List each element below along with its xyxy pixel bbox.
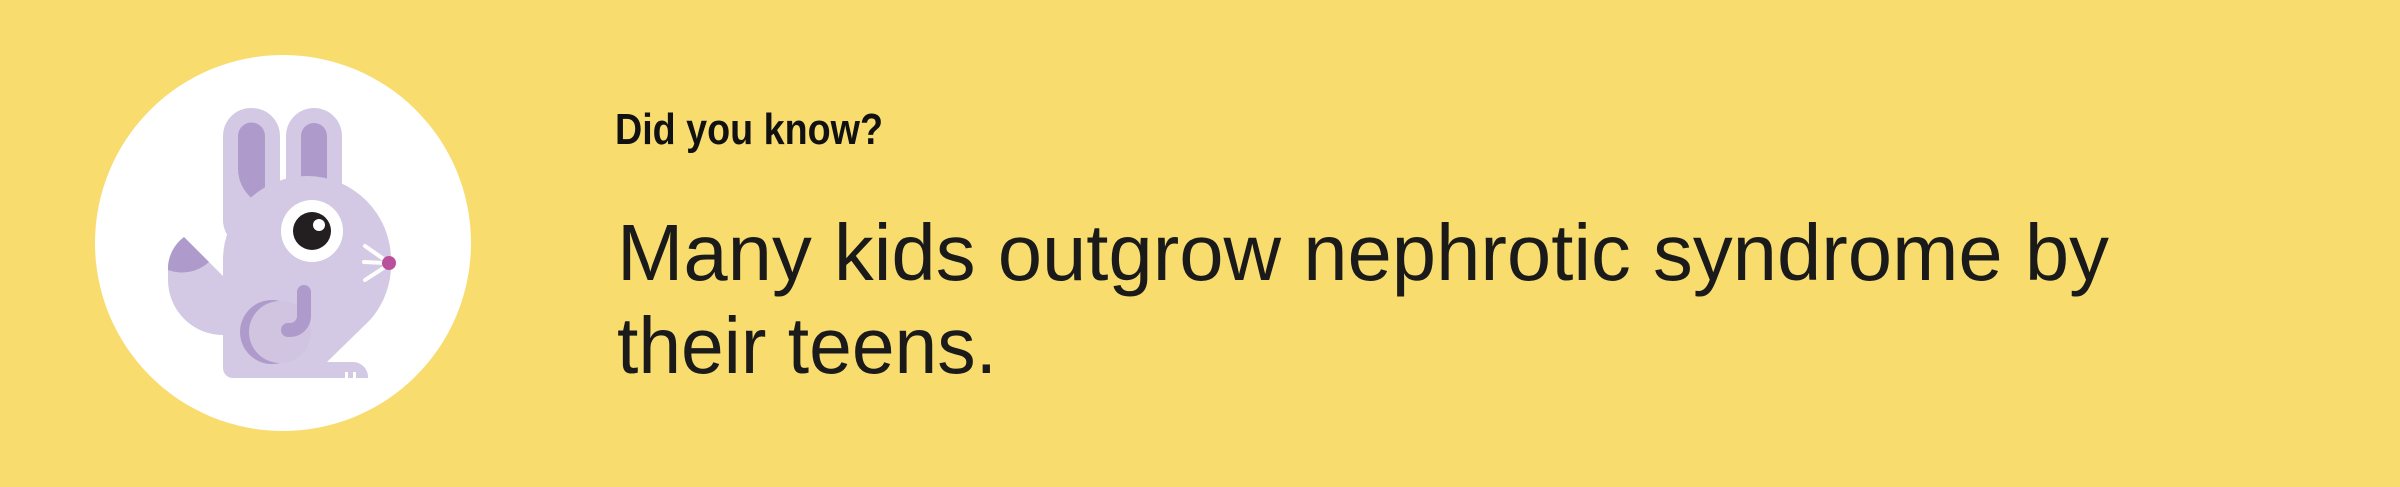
ears xyxy=(223,108,280,248)
tail xyxy=(168,237,223,335)
text block: fact: their teens. xyxy=(617,301,997,390)
leg xyxy=(240,300,304,364)
whiskers and nose xyxy=(364,246,385,280)
text block: fact: Many kids outgrow nephrotic syndrome by xyxy=(617,208,2109,297)
heading: Did you know?: Did you know? xyxy=(615,105,883,154)
text block: fact xyxy=(617,208,2109,390)
toes xyxy=(345,372,348,378)
eye xyxy=(281,200,343,262)
body xyxy=(223,176,391,378)
icon: rabbit in white circle xyxy=(95,55,471,431)
